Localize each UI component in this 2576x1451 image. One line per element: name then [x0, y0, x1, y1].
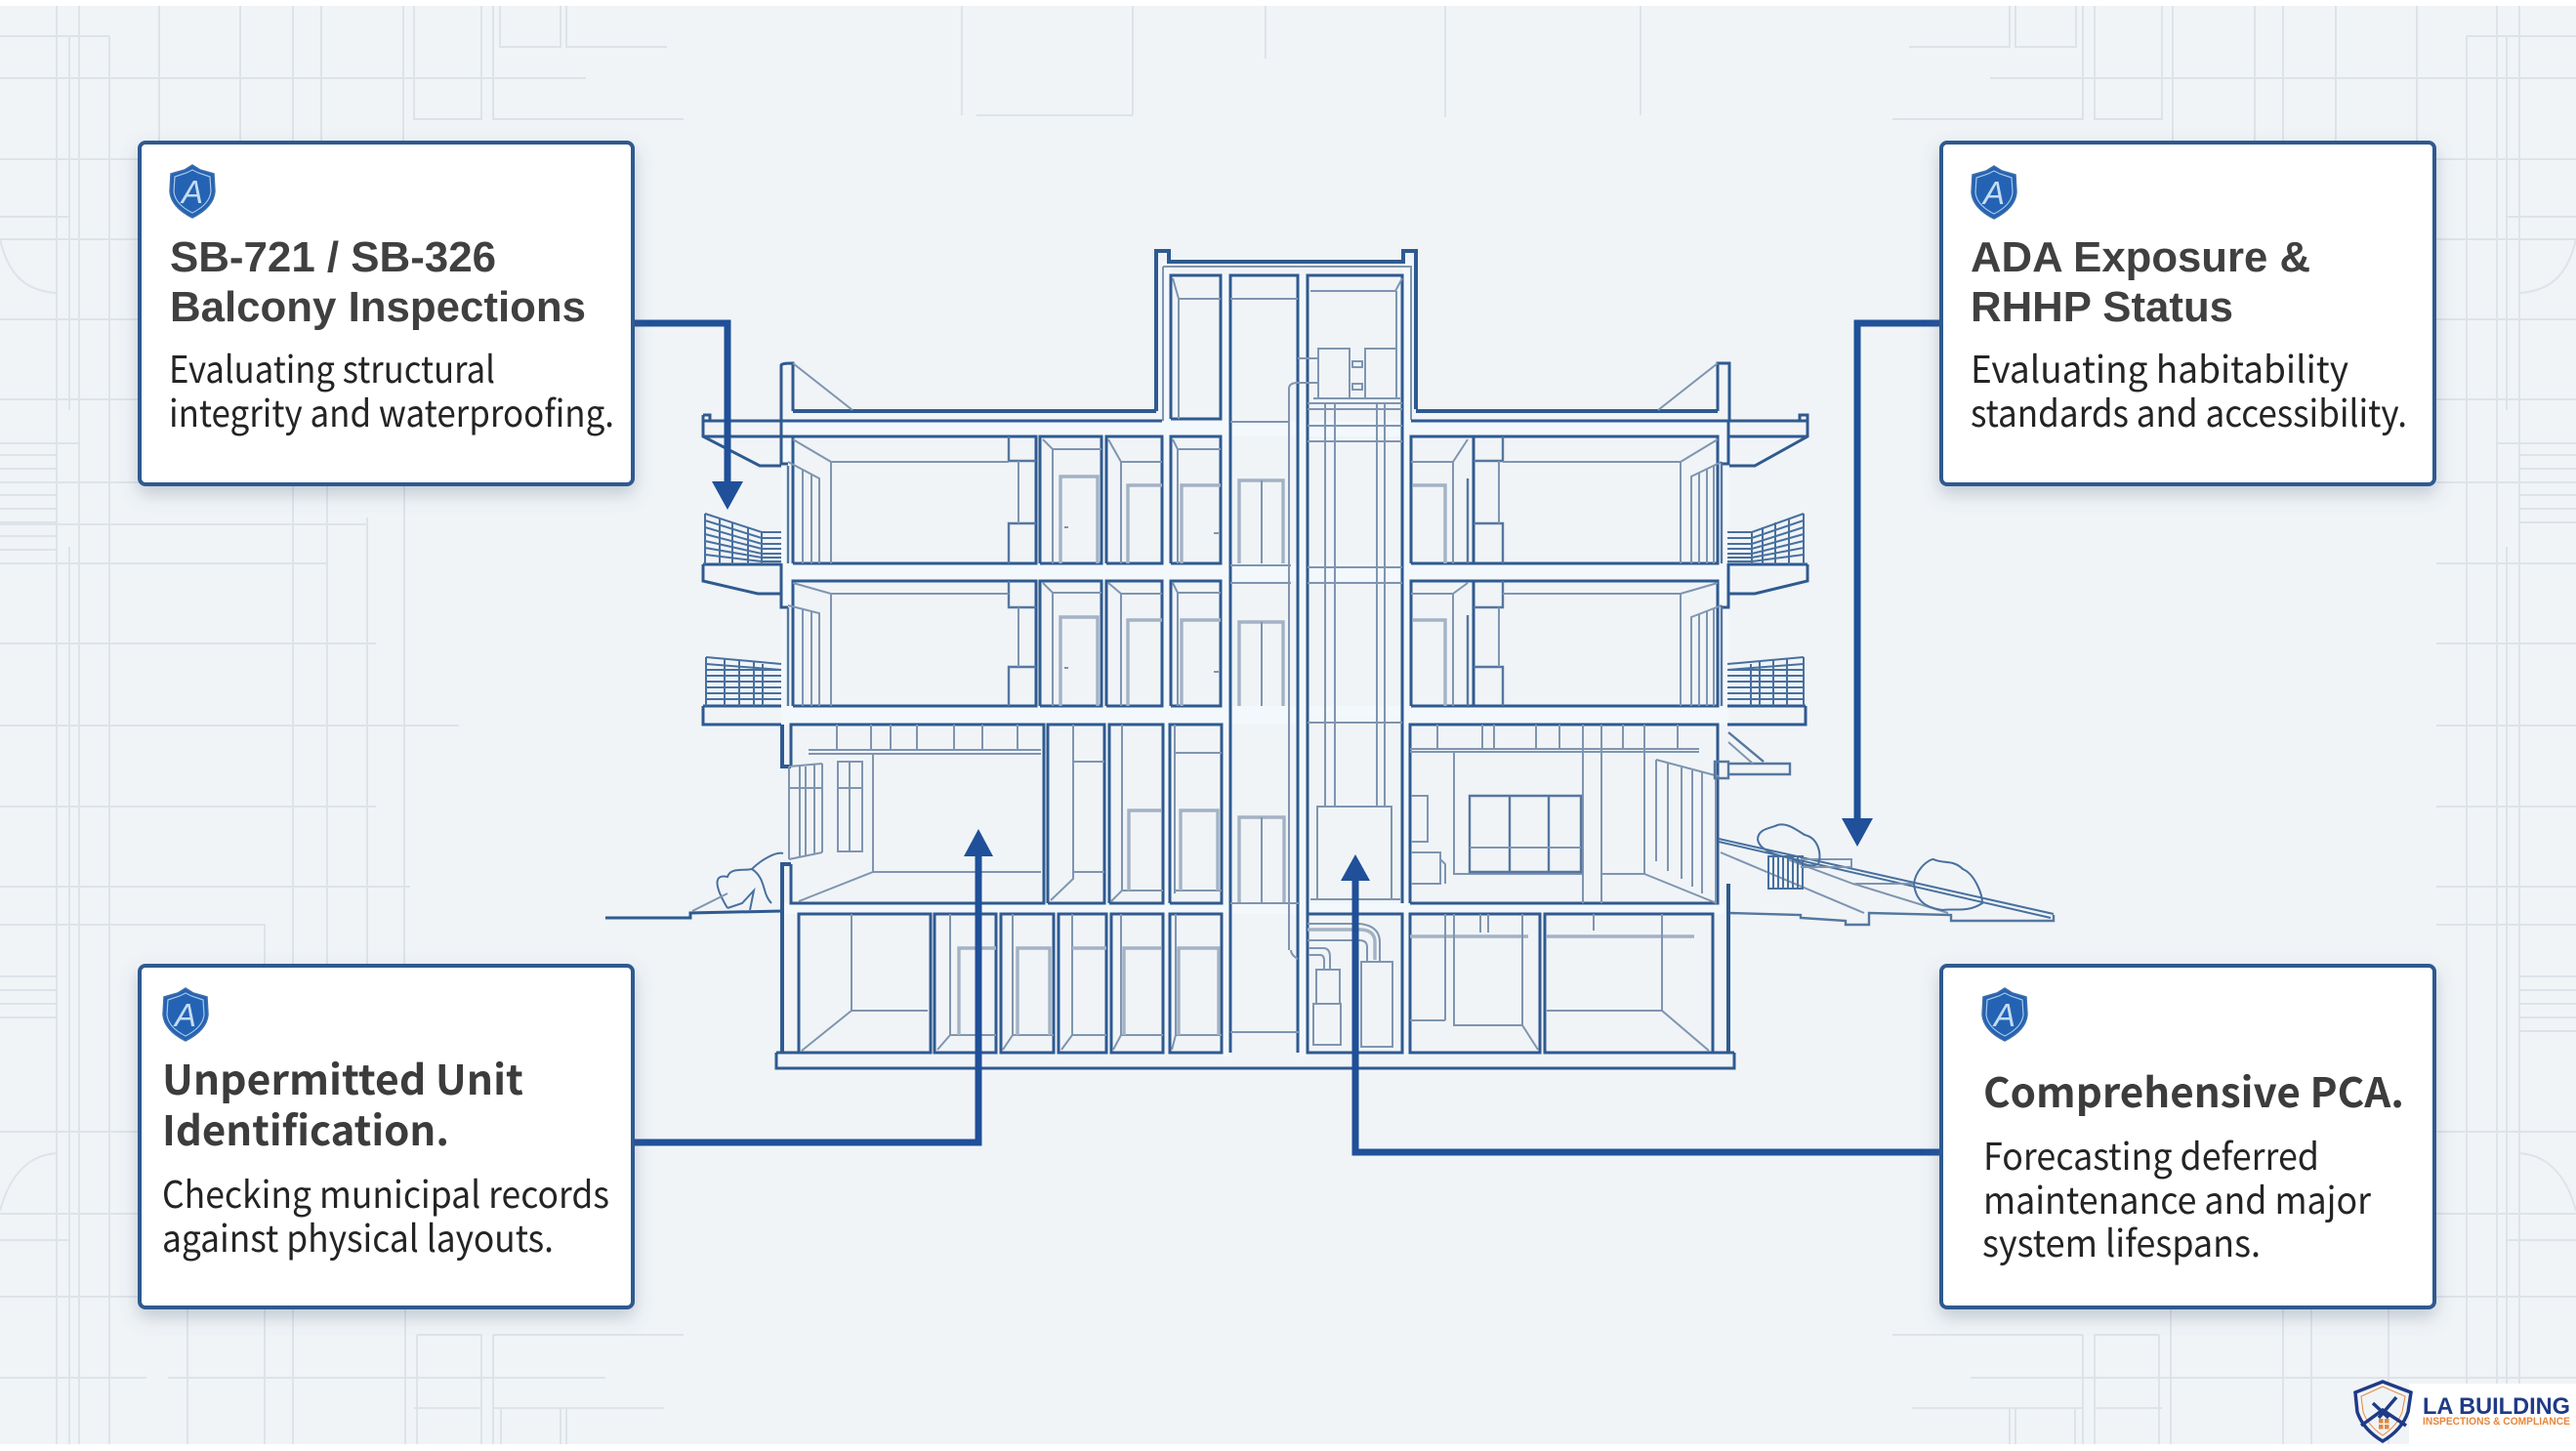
ground floor left rooms: [782, 725, 1300, 1053]
blueprint grid: right half: [1892, 6, 2576, 1444]
logo wordmark: LA BUILDING: [2423, 1393, 2570, 1420]
entrance ramp with planting: [1719, 824, 2054, 925]
logo: LA Building Inspections & Compliance: [2355, 1382, 2576, 1451]
heading: SB-721 / SB-326: [170, 233, 496, 281]
heading: RHHP Status: [1971, 283, 2233, 331]
left roof and parapet: [793, 409, 1156, 413]
basement mechanical room and tanks: [1308, 914, 1402, 1053]
icon: shield: A: [1992, 997, 2015, 1033]
upper right balcony with railing: [1722, 514, 1807, 607]
lower right balcony with railing: [1727, 657, 1806, 725]
ground floor right rooms: [1410, 725, 1719, 903]
panel: SB-721 balcony inspections: [140, 143, 633, 484]
second floor right rooms: [1411, 581, 1722, 706]
description: standards and accessibility.: [1971, 384, 2407, 437]
central tower: [1156, 251, 1416, 1053]
description: Evaluating structural: [169, 340, 495, 394]
icon: shield: [170, 165, 215, 218]
panel: ADA exposure: [1941, 143, 2434, 484]
bottom edge strip: [0, 1444, 2576, 1451]
icon: shield: A: [1981, 175, 2005, 211]
foundation: [776, 1053, 1734, 1068]
description: system lifespans.: [1982, 1214, 2261, 1267]
blueprint grid: left half: [0, 6, 1641, 1444]
small entry canopy right: [1715, 732, 1790, 778]
arrow: PCA card to mechanical systems: [1341, 854, 1940, 1152]
icon: shield: [163, 988, 208, 1041]
panel: comprehensive PCA: [1941, 966, 2434, 1307]
arrow: SB-721 card to balcony: [634, 323, 743, 510]
description: Evaluating habitability: [1971, 340, 2348, 394]
heading: Identification.: [162, 1099, 449, 1158]
third floor right rooms: [1411, 436, 1722, 563]
icon: logo shield: [2355, 1382, 2411, 1441]
icon: shield: [1972, 166, 2016, 219]
description: against physical layouts.: [162, 1209, 554, 1263]
description: Checking municipal records: [162, 1165, 609, 1219]
description: Forecasting deferred: [1983, 1127, 2319, 1181]
top edge strip: [0, 0, 2576, 6]
third floor left rooms: [788, 436, 1283, 563]
concrete slabs: [781, 262, 1729, 1057]
basement right rooms: [1410, 884, 1728, 1053]
upper left balcony with railing: [703, 514, 788, 607]
panel: unpermitted unit identification: [140, 966, 633, 1307]
basement left rooms: [799, 914, 1300, 1053]
heading: Comprehensive PCA.: [1983, 1060, 2404, 1120]
shrub and ground line left: [605, 853, 783, 918]
second floor left rooms: [788, 581, 1283, 706]
heading: Unpermitted Unit: [162, 1048, 523, 1107]
description: integrity and waterproofing.: [169, 384, 614, 437]
description: maintenance and major: [1983, 1171, 2371, 1224]
arrow: unpermitted card to ground floor unit: [634, 829, 993, 1142]
lower left balcony with railing: [703, 657, 781, 725]
right roof and parapet: [1416, 409, 1718, 413]
building cross-section: [605, 251, 2054, 1068]
icon: shield: A: [173, 997, 196, 1033]
arrow: ADA card to entrance ramp: [1842, 323, 1940, 847]
heading: ADA Exposure &: [1971, 233, 2310, 281]
heading: Balcony Inspections: [170, 283, 586, 331]
icon: shield: A: [180, 174, 203, 210]
icon: shield: [1982, 988, 2027, 1041]
